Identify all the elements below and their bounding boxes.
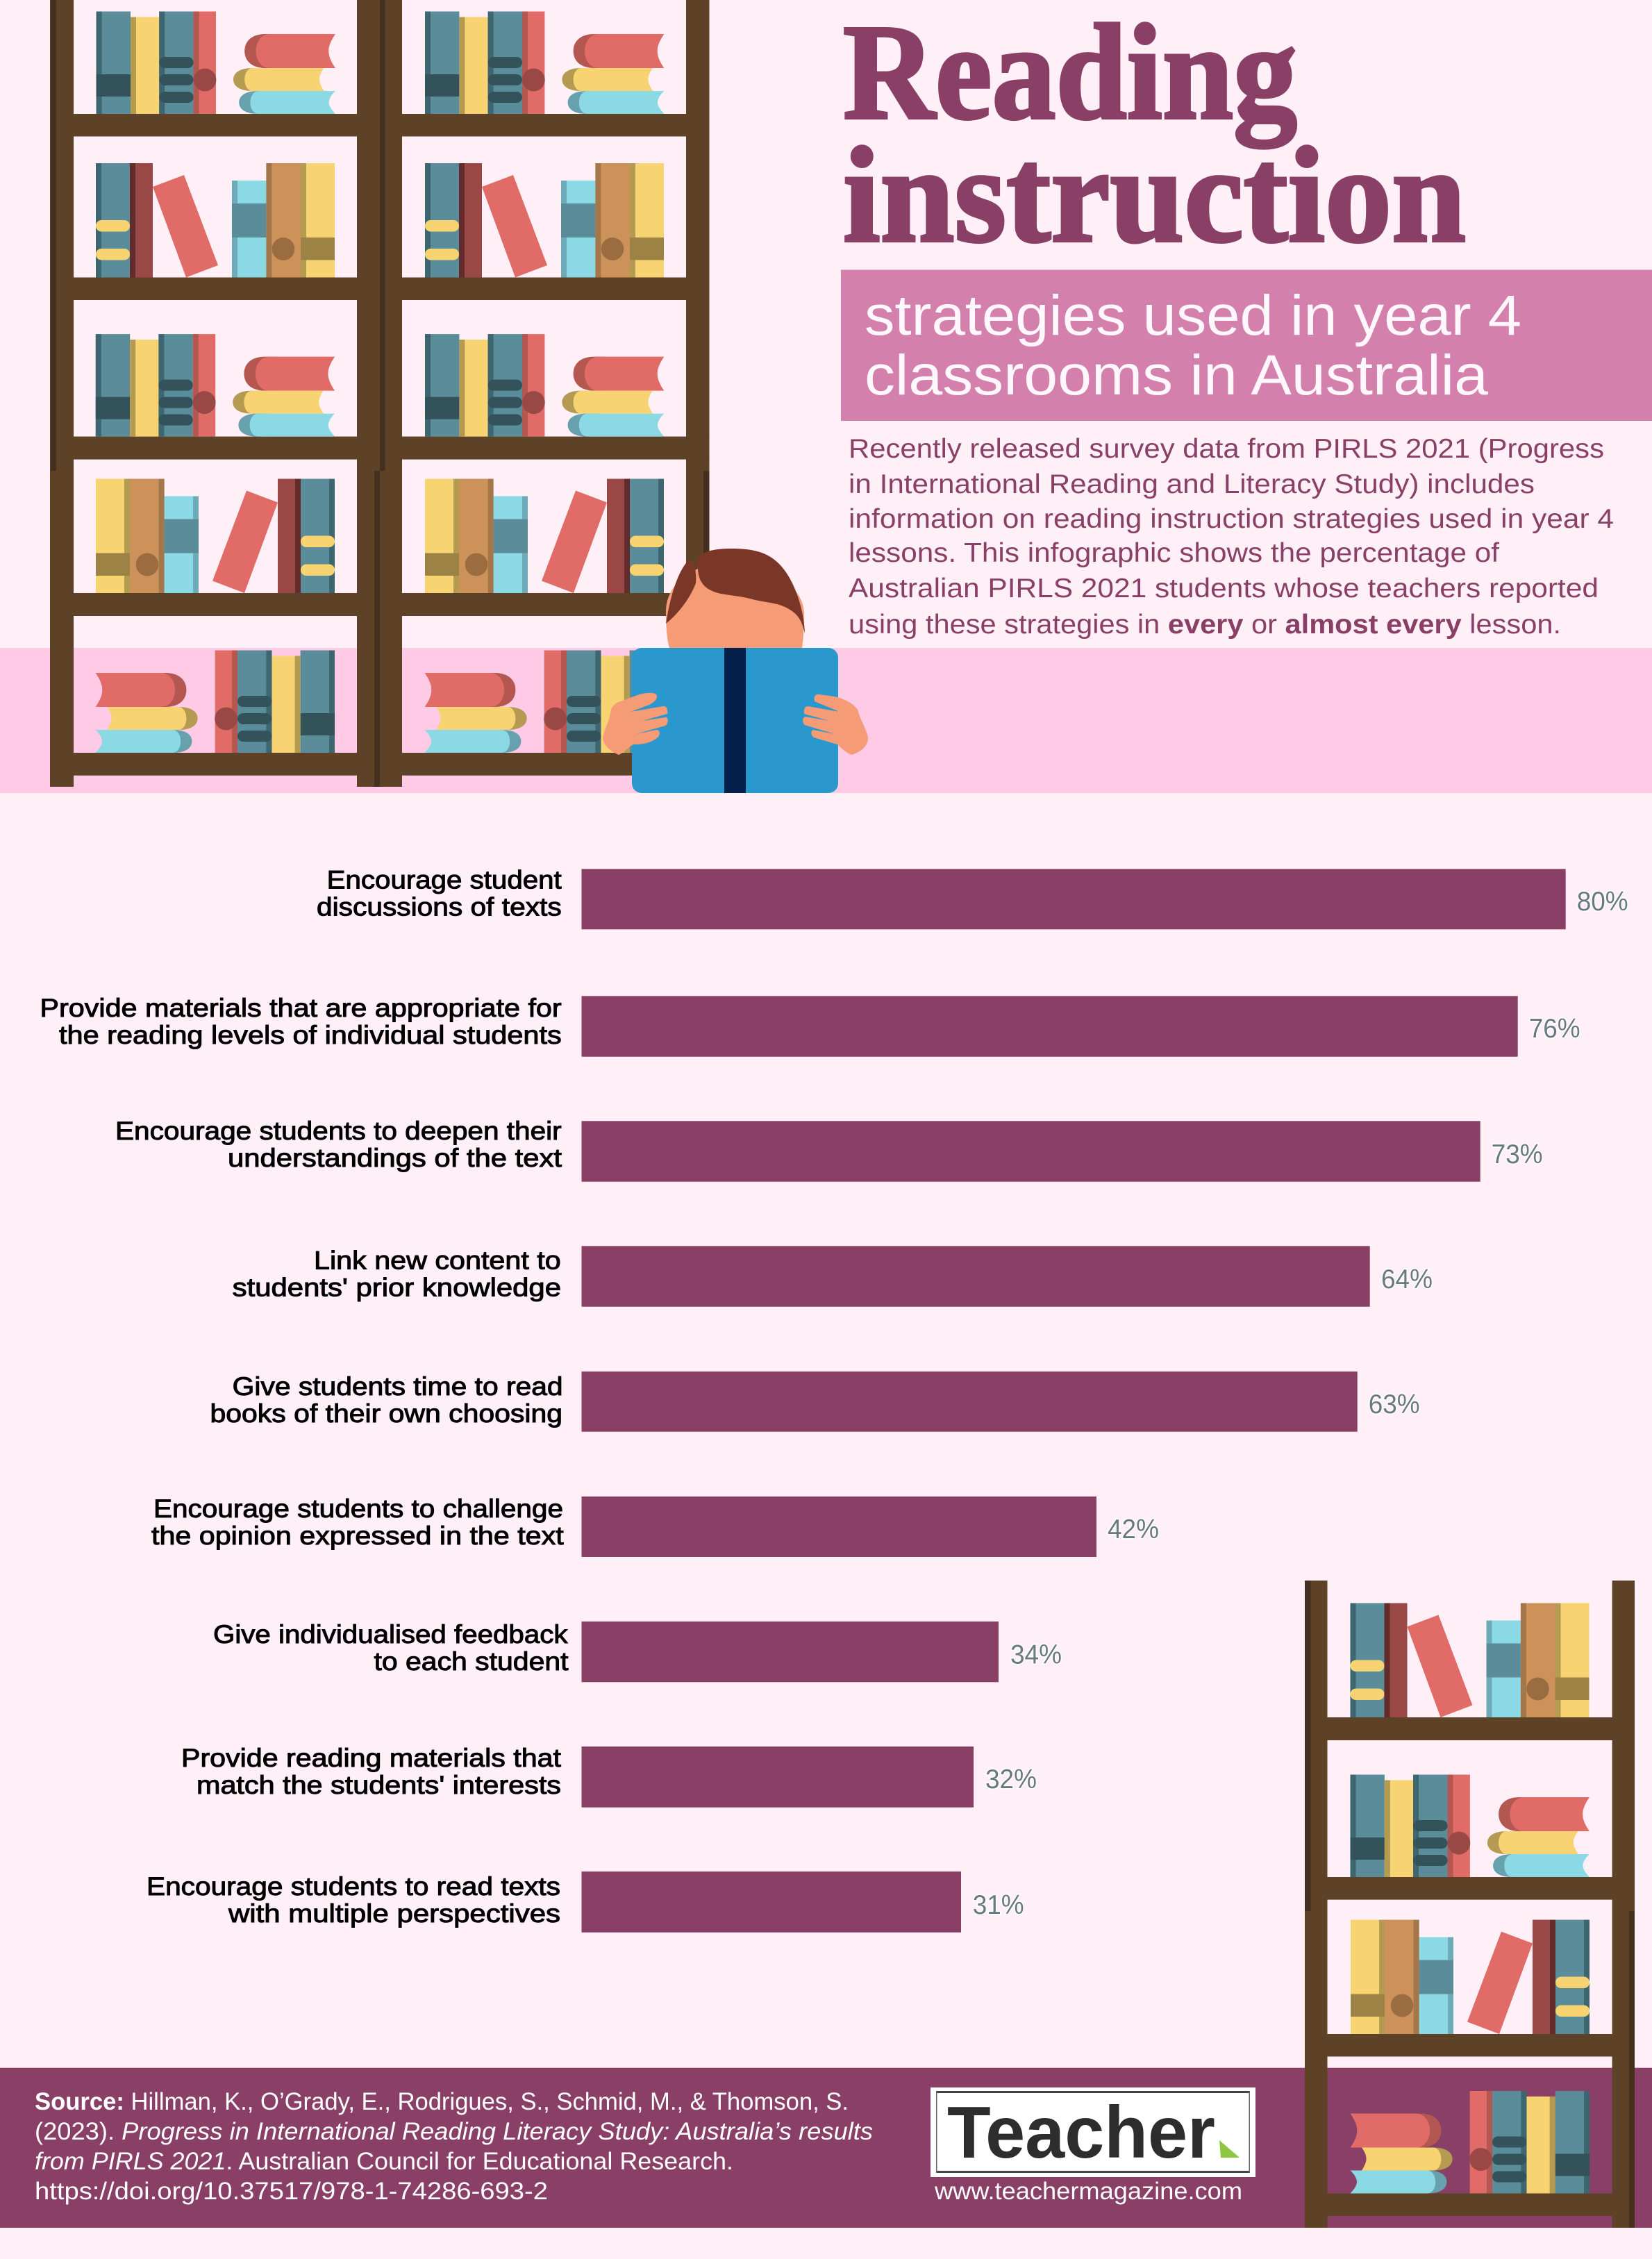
row: prior knowledge 64%: Link new content to [314, 1247, 561, 1275]
intro text block [849, 434, 1614, 640]
row: appropriate materials 76% [40, 994, 1580, 1057]
source citation: Source: Hillman, K., O’Grady, E., Rodrigues, S., Schmid, M., & Thomson, S. [35, 2088, 849, 2115]
intro text block: in International Reading and Literacy Study) includes [849, 469, 1535, 499]
title [843, 0, 1466, 271]
title: Reading [843, 0, 1297, 148]
footer band [0, 2068, 1652, 2228]
subtitle banner: classrooms in Australia [865, 344, 1488, 407]
row: match interests 32%: 32% [985, 1765, 1037, 1794]
pink floor band [0, 648, 1652, 793]
books [1350, 1603, 1590, 2193]
illustration: child reading a book [603, 549, 868, 793]
left hand [603, 693, 668, 755]
row: own choosing 63% [210, 1372, 1420, 1432]
row: challenge opinion 42%: the opinion expressed in the text [151, 1522, 564, 1550]
Teacher logo: Teacher [947, 2092, 1215, 2174]
intro text block: Recently released survey data from PIRLS 2021 (Progress [849, 434, 1604, 464]
row: discussions 80% [317, 866, 1628, 929]
row: multiple perspectives 31%: Encourage students to read texts [147, 1872, 560, 1901]
row: match interests 32%: match the students' interests [197, 1771, 561, 1799]
row: prior knowledge 64%: 64% [1381, 1265, 1433, 1294]
row: own choosing 63%: 63% [1369, 1390, 1420, 1419]
row: individualised feedback 34% [213, 1620, 1062, 1682]
subtitle banner [841, 269, 1652, 421]
bar chart [40, 866, 1628, 1933]
row: individualised feedback 34%: 34% [1010, 1640, 1062, 1670]
intro text block: information on reading instruction strategies used in year 4 [849, 504, 1614, 534]
source citation: (2023). Progress in International Reading Literacy Study: Australia’s results [35, 2118, 873, 2145]
row: match interests 32% [181, 1744, 1037, 1808]
row: challenge opinion 42%: 42% [1108, 1515, 1159, 1544]
illustration: large bookshelf [50, 0, 710, 787]
row: multiple perspectives 31%: with multiple perspectives [228, 1899, 560, 1928]
open book cover [632, 648, 838, 793]
row: discussions 80%: discussions of texts [317, 893, 562, 922]
row: own choosing 63%: Give students time to read [233, 1372, 563, 1401]
row: appropriate materials 76%: 76% [1529, 1014, 1580, 1044]
row: deepen understanding 73% [115, 1117, 1543, 1182]
intro text block: lessons. This infographic shows the percentage of [849, 538, 1499, 568]
title: instruction [843, 119, 1466, 271]
row: appropriate materials 76%: the reading levels of individual students [59, 1021, 562, 1049]
subtitle banner: strategies used in year 4 [865, 284, 1521, 347]
row: deepen understanding 73%: understandings of the text [228, 1144, 562, 1172]
row: challenge opinion 42%: Encourage students to challenge [153, 1494, 563, 1523]
shelf frame [1305, 1581, 1635, 2228]
intro text block: using these strategies in every or almost every lesson. [849, 610, 1561, 640]
row: prior knowledge 64%: students' prior knowledge [233, 1274, 561, 1302]
row: multiple perspectives 31%: 31% [973, 1890, 1024, 1920]
row: match interests 32%: Provide reading materials that [181, 1744, 562, 1772]
row: discussions 80%: 80% [1577, 887, 1628, 917]
row: individualised feedback 34%: Give individualised feedback [213, 1620, 568, 1649]
website: www.teachermagazine.com [934, 2178, 1242, 2205]
source citation: https://doi.org/10.37517/978-1-74286-693-2 [35, 2178, 548, 2205]
face [666, 562, 804, 648]
row: appropriate materials 76%: Provide materials that are appropriate for [40, 994, 562, 1022]
illustration: small bookshelf [1305, 1581, 1635, 2228]
shelf frame [50, 0, 710, 787]
row: individualised feedback 34%: to each student [374, 1647, 569, 1676]
books: left column [96, 11, 335, 753]
row: challenge opinion 42% [151, 1494, 1159, 1557]
source citation: from PIRLS 2021. Australian Council for Educational Research. [35, 2148, 733, 2175]
source citation [35, 2088, 873, 2205]
books: right column [425, 11, 664, 753]
row: deepen understanding 73%: Encourage students to deepen their [115, 1117, 562, 1145]
hair [666, 549, 805, 633]
row: deepen understanding 73%: 73% [1492, 1140, 1543, 1169]
intro text block: Australian PIRLS 2021 students whose teachers reported [849, 574, 1599, 603]
row: prior knowledge 64% [233, 1246, 1433, 1307]
row: discussions 80%: Encourage student [327, 866, 562, 894]
book spine [724, 648, 746, 793]
right hand [803, 694, 868, 755]
row: own choosing 63%: books of their own choosing [210, 1399, 562, 1428]
row: multiple perspectives 31% [147, 1872, 1024, 1933]
